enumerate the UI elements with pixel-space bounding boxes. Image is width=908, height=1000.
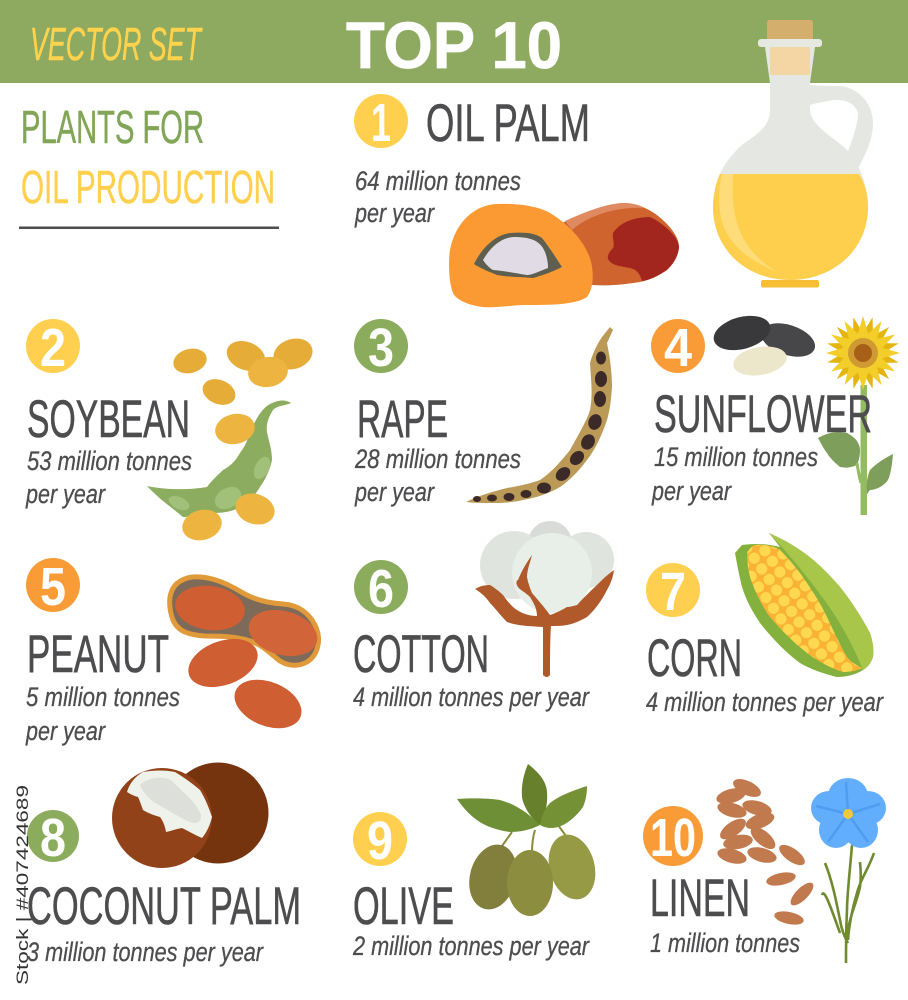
name: OLIVE — [353, 877, 454, 936]
badge 2 — [26, 318, 80, 378]
badge 3 — [354, 318, 408, 378]
badge 8: 8 — [40, 808, 66, 868]
badge 4 — [651, 318, 705, 378]
panel: oil palm — [354, 93, 679, 307]
badge 10: 10 — [650, 808, 696, 868]
icon: cotton boll — [475, 521, 614, 677]
amount: per year — [25, 716, 106, 746]
amount: 3 million tonnes per year — [27, 937, 264, 967]
icon: rape pod — [466, 327, 613, 503]
icon: flax seeds — [715, 775, 817, 927]
panel: corn — [646, 533, 884, 717]
name: RAPE — [357, 390, 448, 449]
icon: sunflower plant — [818, 308, 908, 515]
watermark: stock number: Stock | #407424689 — [13, 785, 32, 985]
amount: 4 million tonnes per year — [353, 682, 590, 712]
amount — [25, 446, 192, 509]
panel: linen — [643, 775, 886, 963]
badge 9: 9 — [367, 811, 393, 871]
heading: plants for oil production: PLANTS FOR — [21, 101, 204, 153]
amount — [354, 444, 521, 507]
badge 6: 6 — [368, 559, 394, 619]
name: OIL PALM — [426, 94, 590, 153]
amount: per year — [25, 479, 106, 509]
name: COCONUT PALM — [27, 877, 301, 936]
badge 5: 5 — [40, 557, 66, 617]
name: COTTON — [353, 625, 489, 684]
panel: rape — [354, 318, 613, 507]
label: vector set: VECTOR SET — [30, 18, 203, 70]
amount: 1 million tonnes — [650, 928, 800, 958]
badge 1 — [354, 93, 408, 153]
amount — [354, 166, 521, 228]
amount: 64 million tonnes — [355, 166, 521, 196]
amount: 15 million tonnes — [654, 442, 818, 472]
badge 1: 1 — [371, 93, 391, 153]
name: LINEN — [650, 869, 750, 928]
panel: oil bottle — [713, 20, 873, 288]
amount: per year — [651, 476, 732, 506]
amount: 5 million tonnes — [26, 682, 180, 712]
heading: plants for oil production — [19, 101, 279, 229]
amount: 28 million tonnes — [354, 444, 521, 474]
panel: coconut palm — [27, 762, 301, 967]
badge 7 — [646, 562, 700, 622]
name: CORN — [647, 629, 742, 688]
name: PEANUT — [27, 625, 169, 684]
icon: palm fruit — [449, 203, 679, 307]
badge 3: 3 — [368, 318, 394, 378]
badge 4: 4 — [664, 318, 692, 378]
icon: flax flower — [811, 778, 886, 963]
panel: soybean — [25, 318, 317, 545]
amount: 53 million tonnes — [27, 446, 192, 476]
badge 2: 2 — [40, 318, 66, 378]
badge 8 — [27, 808, 79, 868]
amount — [651, 442, 818, 506]
panel: header banner — [0, 0, 908, 83]
badge 7: 7 — [660, 562, 686, 622]
panel: sunflower — [651, 308, 908, 515]
icon: peanuts — [170, 577, 323, 738]
icon: corn cob — [735, 533, 873, 677]
amount: per year — [354, 477, 435, 507]
amount — [25, 682, 180, 746]
badge 9 — [353, 811, 407, 871]
panel: cotton — [353, 521, 614, 712]
icon: soybeans and pod — [147, 334, 317, 545]
badge 6 — [354, 559, 408, 619]
amount: 2 million tonnes per year — [352, 931, 590, 961]
icon: coconut — [112, 762, 268, 868]
title: TOP 10 — [346, 8, 562, 82]
heading: plants for oil production: OIL PRODUCTION — [21, 161, 275, 213]
icon: sunflower seeds — [710, 310, 819, 379]
amount: per year — [354, 198, 435, 228]
panel: olive — [352, 764, 602, 961]
icon: olives and leaves — [457, 764, 602, 916]
panel: peanut — [25, 557, 323, 746]
badge 5 — [26, 557, 80, 617]
name: SOYBEAN — [27, 390, 190, 449]
